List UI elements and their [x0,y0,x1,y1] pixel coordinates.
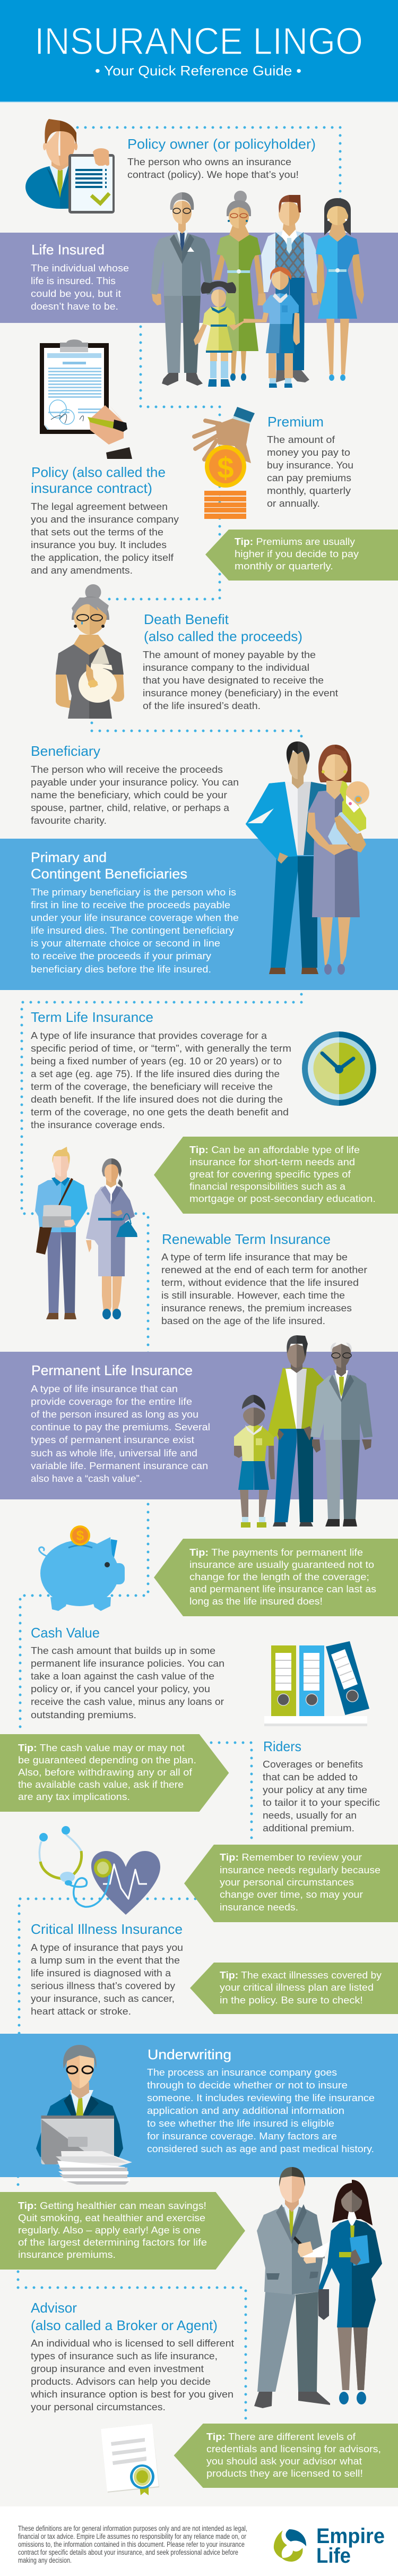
panel: underwriting: for insurance coverage. Many factors are [147,2131,337,2142]
text block: beneficiary: name the beneficiary, which could be your [31,790,227,800]
disclaimer text: These definitions are for general information purposes only and are not intended as legal, [18,2524,247,2532]
callout: term life tip: financial responsibilities such as a [189,1181,346,1192]
text block: policy: insurance you buy. It includes [31,540,167,550]
text block: premium: buy insurance. You [267,460,353,471]
icon: paper stack [56,2151,132,2185]
text block: riders: additional premium. [263,1823,354,1833]
text block: policy: that sets out the terms of the [31,527,163,538]
text block: policy [31,464,179,576]
panel: permanent life insurance: such as whole life, universal life and [31,1448,197,1458]
text block: beneficiary: spouse, partner, child, relative, or perhaps a [31,803,230,813]
icon: policy owner with clipboard [25,119,115,214]
callout: getting healthier tip: Quit smoking, eat healthier and exercise [18,2213,205,2223]
icon: clipboard with signed contract [40,339,132,459]
callout: term life tip: mortgage or post-secondary education. [189,1193,376,1204]
illustration: advisors [254,2167,382,2408]
text block: death benefit [143,611,338,711]
figure: father in vest [258,195,320,382]
disclaimer text: contract for specific details about your insurance, and seek professional advice before [18,2548,238,2556]
figure: son in yellow cardigan [259,1335,326,1526]
icon: piggy bank [39,1525,125,1611]
callout: cash value tip [0,1734,229,1812]
panel: permanent life insurance [0,1352,398,1499]
callout: critical illness tip: your critical illness plan are listed [220,1982,374,1993]
illustration: underwriter at laptop [36,2045,132,2185]
panel: life insured: could be you, but it [31,288,121,299]
panel: permanent life insurance: of the person insured as long as you [31,1409,198,1420]
panel: primary and contingent beneficiaries: to receive the proceeds if your primary [31,951,211,961]
text block: death benefit: (also called the proceeds) [144,628,302,644]
callout: review needs tip: insurance needs. [220,1902,298,1913]
callout: review needs tip: change over time, so may your [220,1889,363,1900]
text block: critical illness insurance: your insurance, such as cancer, [31,1993,175,2004]
text block: policy: The legal agreement between [31,501,168,512]
text block: riders: that can be added to [263,1772,358,1782]
illustration: couple with baby [246,741,369,975]
text block: beneficiary: The person who will receive the proceeds [31,764,223,775]
panel: underwriting: Underwriting [148,2046,231,2062]
callout: review needs tip: insurance needs regularly because [220,1865,380,1875]
figure: girl [194,281,247,387]
icon: clock [302,1031,376,1106]
text block: death benefit: of the life insured’s death. [143,701,261,711]
text block: renewable term insurance: Renewable Term Insurance [162,1231,331,1247]
figure: grandfather in grey suit [310,1343,373,1526]
panel: permanent life insurance: also have a “cash value”. [31,1473,142,1484]
icon: hand dropping coin [194,407,255,519]
text block: critical illness insurance: life insured is diagnosed with a [31,1968,171,1978]
text block: advisor: types of insurance such as life insurance, [31,2351,218,2361]
text block: cash value: take a loan against the cash value of the [31,1671,214,1682]
callout: credentials tip: Tip: There are different levels of [206,2432,356,2442]
text block: beneficiary [31,743,239,826]
text block: renewable term insurance [161,1231,367,1326]
panel: life insured: doesn’t have to be. [31,301,118,312]
text block: advisor: your personal circumstances. [31,2402,166,2412]
callout: cash value tip: the available cash value, ask if there [18,1779,184,1790]
text block: policy owner [127,136,316,180]
callout: cash value tip: are any tax implications. [18,1792,130,1802]
text block: cash value: outstanding premiums. [31,1710,136,1720]
callout: critical illness tip: Tip: The exact illnesses covered by [220,1970,382,1981]
callout: credentials tip: products they are licensed to sell! [206,2468,363,2479]
panel: primary and contingent beneficiaries: is your alternate choice or second in line [31,938,220,949]
icon: stethoscope and heart [39,1826,160,1915]
text block: riders: your policy at any time [263,1785,367,1795]
text block: premium: money you pay to [267,447,350,458]
header panel [0,0,398,102]
panel: permanent life insurance: continue to pay the premiums. Several [31,1422,210,1432]
subtitle: • Your Quick Reference Guide • [95,63,301,79]
text block: cash value: Cash Value [31,1625,100,1641]
panel: primary and contingent beneficiaries: first in line to receive the proceeds payable [31,900,230,910]
panel: underwriting [0,2034,398,2177]
figure: male advisor [254,2167,330,2408]
panel: underwriting: considered such as age and past medical history. [147,2144,374,2154]
logo: Empire Life: Empire [316,2524,385,2548]
illustration: young man and woman [35,1147,137,1319]
panel: underwriting: to see whether the life insured is eligible [147,2118,334,2129]
callout: critical illness tip: in the policy. Be sure to check! [220,1995,363,2006]
text block: advisor: which insurance option is best for you given [30,2389,233,2400]
figure: baby [328,781,369,850]
callout: getting healthier tip: insurance premiums. [18,2249,116,2260]
text block: term life insurance: a set age (eg. age 75). If the life insured dies during the [31,1069,280,1079]
text block: death benefit: insurance company to the individual [143,662,309,673]
text block: premium: The amount of [267,434,335,445]
text block: premium: Premium [267,414,324,430]
logo: Empire Life [274,2524,385,2568]
text block: riders: needs, usually for an [263,1810,357,1821]
figure: grandmother [213,191,265,381]
text block: term life insurance: death benefit. If the life insured does not die during the [31,1094,283,1105]
text block: beneficiary: Beneficiary [31,743,100,759]
callout: review needs tip: Tip: Remember to review your [220,1852,362,1863]
text block: riders: to tailor it to your specific [263,1797,380,1808]
callout: critical illness tip [190,1963,398,2014]
callout: review needs tip: your personal circumstances [220,1877,354,1888]
text block: death benefit: The amount of money payable by the [143,650,316,660]
disclaimer text [18,2524,247,2564]
text block: renewable term insurance: term, without evidence that the life insured [161,1277,359,1288]
text block: death benefit: insurance money (beneficiary) in the event [143,688,338,698]
text block: term life insurance: specific period of time, or “term”, with generally the term [31,1043,291,1054]
text block: premium: can pay premiums [267,473,351,483]
text block: term life insurance [31,1009,291,1130]
callout: credentials tip: credentials and licensing for advisors, [206,2444,381,2454]
panel: life insured: life is insured. This [31,276,116,286]
figure: woman with handbag [86,1158,137,1319]
text block: advisor: products. Advisors can help you decide [31,2376,211,2387]
panel: life insured [0,233,398,323]
callout: premium tip: higher if you decide to pay [235,549,359,559]
figure: grandfather [151,192,213,386]
footer panel [0,2506,398,2576]
callout: cash value tip: be guaranteed depending on the plan. [18,1755,196,1765]
text block: renewable term insurance: A type of term life insurance that may be [161,1252,348,1263]
illustration: grieving woman with baby [56,584,124,719]
figure: young man [35,1147,88,1319]
icon: certificate [101,2424,159,2495]
text block: policy: the application, the policy itself [31,552,174,563]
text block: policy owner: Policy owner (or policyholder) [127,136,316,152]
callout: getting healthier tip: regularly. Also – apply early! Age is one [18,2225,201,2236]
callout: premium tip: monthly or quarterly. [235,561,333,572]
text block: cash value: policy or, if you cancel your policy, you [31,1684,210,1694]
text block: renewable term insurance: renewed at the end of each term for another [161,1265,367,1275]
callout: term life tip: insurance for short-term needs and [189,1157,355,1167]
disclaimer text: making any decision. [18,2556,72,2564]
panel: permanent life insurance: A type of life insurance that can [31,1384,178,1394]
figure: mother in blue [316,198,364,381]
callout: term life tip: great for covering specific types of [189,1169,351,1180]
panel: underwriting: application and any additional information [147,2105,344,2116]
figure: husband [246,741,327,974]
callout: cash value tip: Also, before withdrawing any or all of [18,1767,193,1778]
panel: primary and contingent beneficiaries [0,839,398,990]
panel: primary and contingent beneficiaries: life insured dies. The contingent beneficiary [31,925,234,936]
callout: permanent life tip: and permanent life insurance can last as [189,1584,376,1594]
text block: critical illness insurance [31,1921,183,2017]
text block: riders: Coverages or benefits [263,1759,363,1770]
text block: death benefit: Death Benefit [144,611,229,627]
panel: permanent life insurance: variable life. Permanent insurance can [31,1461,208,1471]
panel: permanent life insurance: Permanent Life Insurance [31,1362,193,1378]
figure: wife [307,745,369,975]
panel: underwriting: The process an insurance company goes [147,2067,337,2078]
text block: beneficiary: payable under your insurance policy. You can [31,777,239,788]
callout: getting healthier tip: of the largest determining factors for life [18,2237,207,2248]
text block: critical illness insurance: serious illness that’s covered by [31,1981,175,1991]
callout: credentials tip: you should ask your advisor what [206,2456,362,2467]
panel: primary and contingent beneficiaries: Primary and [31,849,107,865]
panel: life insured: The individual whose [31,263,129,274]
panel: primary and contingent beneficiaries: The primary beneficiary is the person who is [31,887,236,898]
panel: permanent life insurance: provide coverage for the entire life [31,1396,192,1407]
title: INSURANCE LINGO [34,21,363,63]
panel: underwriting: through to decide whether or not to insure [147,2080,348,2091]
callout: premium tip: Tip: Premiums are usually [235,536,355,547]
disclaimer text: financial or tax advice. Empire Life assumes no responsibility for any reliance made on, or [18,2532,246,2540]
text block: policy owner: contract (policy). We hope that’s you! [127,169,299,180]
icon: coin [70,1525,90,1546]
text block: policy owner: The person who owns an insurance [127,157,291,167]
panel: primary and contingent beneficiaries: Contingent Beneficiaries [31,866,187,882]
callout: term life tip: Tip: Can be an affordable type of life [189,1145,360,1155]
callout: credentials tip [174,2424,398,2488]
text block: term life insurance: Term Life Insurance [31,1009,153,1025]
text block: term life insurance: the insurance coverage ends. [31,1120,165,1130]
panel: primary and contingent beneficiaries: beneficiary dies before the life insured. [31,964,211,975]
text block: cash value: permanent life insurance policies. You can [31,1658,224,1669]
panel: primary and contingent beneficiaries: under your life insurance coverage when the [31,912,239,923]
text block: term life insurance: term of the coverage, the beneficiary will receive the [31,1081,273,1092]
logo: Empire Life: Life [316,2544,351,2568]
text block: critical illness insurance: A type of insurance that pays you [31,1942,183,1953]
panel: underwriting: someone. It includes reviewing the life insurance [147,2093,375,2103]
text block: riders: Riders [263,1738,301,1754]
illustration: family [151,191,364,388]
figure: female advisor [318,2180,382,2404]
text block: advisor [30,2300,234,2412]
callout: getting healthier tip: Tip: Getting healthier can mean savings! [18,2200,206,2211]
panel: permanent life insurance: types of permanent insurance exist [31,1435,194,1445]
callout: permanent life tip: Tip: The payments for permanent life [189,1547,363,1558]
text block: cash value: receive the cash value, minus any loans or [31,1696,224,1707]
text block: advisor: group insurance and even investment [31,2364,204,2374]
icon: coin: $ [76,1528,84,1543]
text block: premium [267,414,353,509]
callout: term life tip [154,1137,398,1214]
text block: advisor: An individual who is licensed to sell different [31,2338,234,2349]
callout: permanent life tip: insurance are usually guaranteed not to [189,1559,374,1570]
text block: advisor: Advisor [31,2300,77,2316]
text block: renewable term insurance: is still insurable. However, each time the [161,1290,345,1301]
text block: policy: you and the insurance company [31,514,179,525]
text block: riders [263,1738,380,1833]
text block: policy: insurance contract) [31,480,152,496]
dotted connector path [18,127,340,2423]
text block: beneficiary: favourite charity. [31,815,107,826]
text block: critical illness insurance: heart attack or stroke. [31,2006,131,2017]
text block: term life insurance: A type of life insurance that provides coverage for a [31,1030,267,1041]
text block: premium: monthly, quarterly [267,485,351,496]
callout: getting healthier tip [0,2192,245,2270]
callout: review needs tip [184,1845,398,1922]
text block: critical illness insurance: a lump sum in the event that the [31,1955,180,1966]
text block: term life insurance: being a fixed number of years (eg. 10 or 20 years) or to [31,1056,282,1067]
panel: life insured: Life Insured [31,242,105,258]
text block: advisor: (also called a Broker or Agent) [31,2317,218,2333]
text block: cash value: The cash amount that builds up in some [31,1645,215,1656]
text block: death benefit: that you have designated to receive the [143,675,324,686]
text block: term life insurance: term of the coverage, no one gets the death benefit and [31,1107,289,1118]
icon: hand dropping coin: $ [217,451,234,484]
figure: grandson [234,1395,275,1528]
text block: policy: Policy (also called the [31,464,166,480]
callout: permanent life tip [154,1539,398,1616]
text block: renewable term insurance: insurance renews, the premium increases [161,1303,352,1313]
callout: premium tip [205,530,398,581]
callout: cash value tip: Tip: The cash value may or may not [18,1743,185,1753]
disclaimer text: omissions to, the information contained in this document. Please refer to your insurance [18,2540,245,2548]
text block: critical illness insurance: Critical Illness Insurance [31,1921,183,1937]
illustration: three generations [234,1335,373,1528]
callout: permanent life tip: change for the length of the coverage; [189,1572,369,1582]
callout: permanent life tip: long as the life insured does! [189,1596,323,1607]
figure: boy [244,267,300,388]
text block: policy: and any amendments. [31,565,133,576]
text block: cash value [31,1625,224,1720]
icon: binders on shelf [264,1641,369,1726]
text block: renewable term insurance: based on the age of the life insured. [161,1316,325,1326]
text block: premium: or annually. [267,498,320,509]
